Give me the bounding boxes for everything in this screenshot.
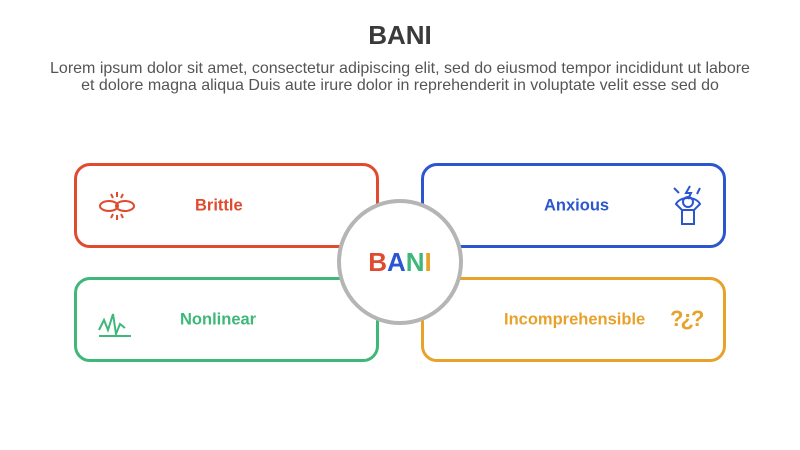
icon: stressed person [673,186,702,225]
icon: broken chain [99,192,135,220]
title: BANI [368,20,432,50]
panel: incomprehensible [421,277,726,362]
icon: question marks: ?¿? [670,306,701,331]
description: Lorem ipsum dolor sit amet, consectetur adipiscing elit, sed do eiusmod tempor incididunt ut labore [50,60,750,77]
panel: anxious [421,163,726,248]
center circle [337,199,463,325]
label: incomprehensible: Incomprehensible [504,310,645,328]
description [50,60,750,94]
description: et dolore magna aliqua Duis aute irure dolor in reprehenderit in voluptate velit esse sed do [81,77,719,94]
panel: brittle [74,163,379,248]
label: anxious: Anxious [544,196,609,214]
panel: nonlinear [74,277,379,362]
label: brittle: Brittle [195,196,243,214]
label: nonlinear: Nonlinear [180,310,256,328]
icon: chart line [98,314,131,338]
center circle: BANI [368,247,432,277]
